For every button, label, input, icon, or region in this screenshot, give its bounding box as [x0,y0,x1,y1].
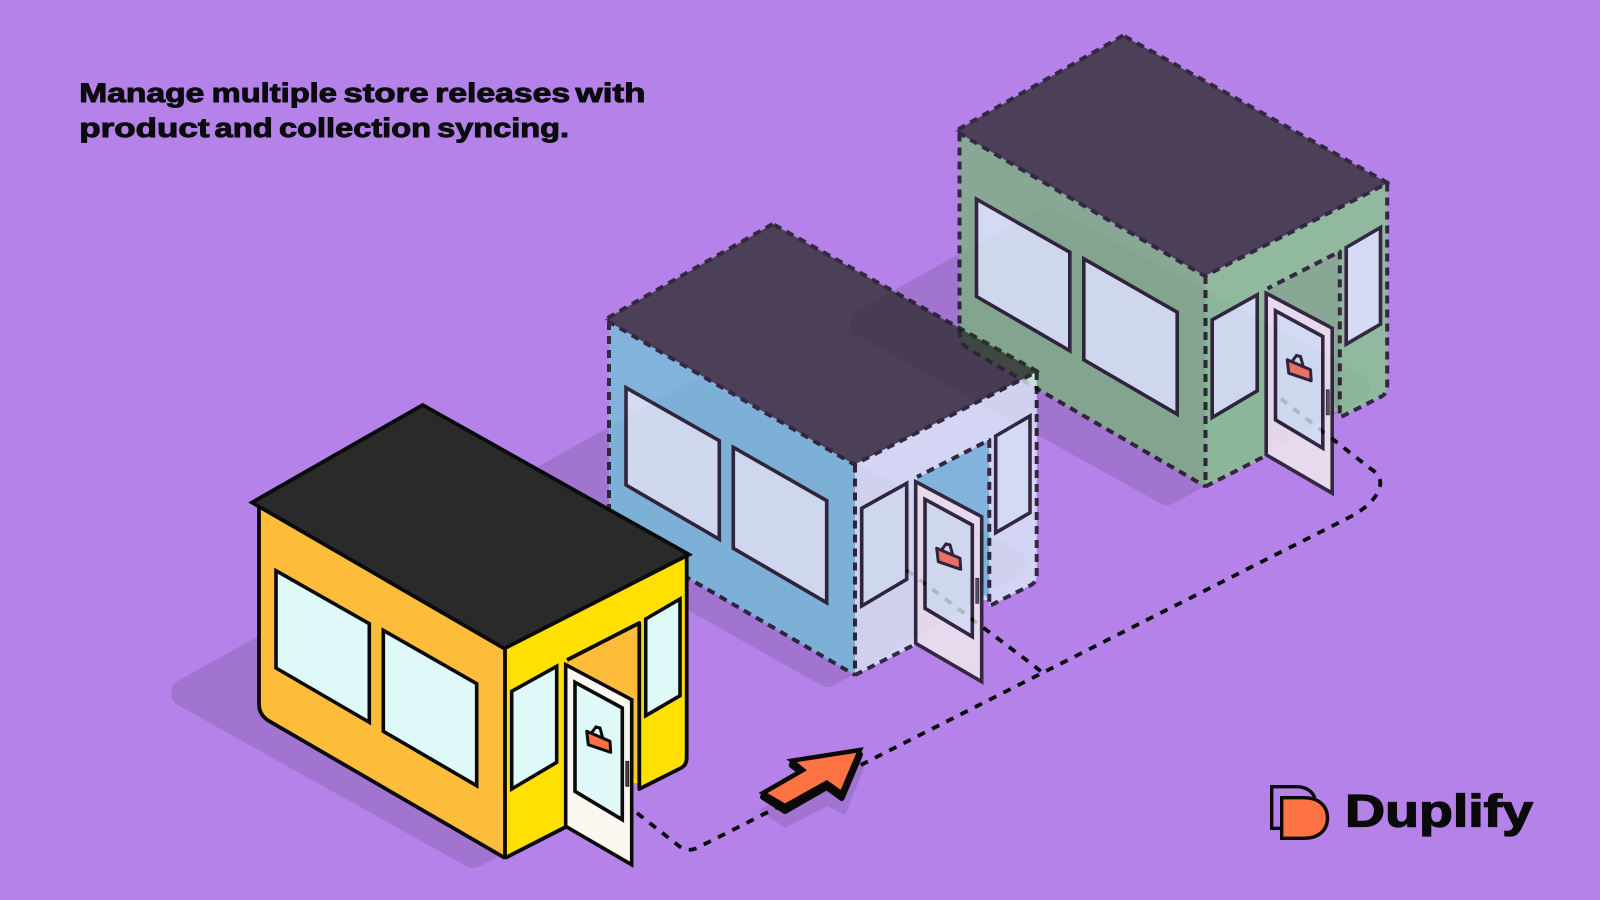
shadow: yellow store [185,591,661,854]
headline text: collection [279,113,431,143]
headline text: syncing. [437,113,569,143]
right wall [1206,184,1387,486]
roof [252,405,689,648]
roof edges [956,36,1388,276]
headline text: store [343,78,429,108]
open door [916,482,982,682]
doorway interior [1268,252,1340,412]
roof [605,224,1037,464]
arrow face [763,750,860,806]
wall edges [960,134,1387,488]
roof [956,36,1388,276]
logo mark [1272,787,1328,838]
store: blue release (dashed) [605,224,1037,682]
shadow: green store [864,221,1356,491]
shop windows [976,199,1380,418]
left wall [960,134,1206,486]
arrow shadow [758,750,864,828]
dashed route connecting the store doors [637,398,1380,850]
roof edges [605,224,1037,464]
shadow: blue store [514,394,1013,673]
headline text: Manage [79,78,204,108]
right wall [505,555,687,858]
wall edges [609,322,1037,676]
arrow extrusion [763,754,860,811]
headline text: product [79,113,210,143]
doorway interior [567,623,639,783]
headline text: and [214,113,273,143]
store: yellow live store (solid) [252,405,689,865]
arrow icon [758,750,864,828]
headline text [79,78,646,143]
open door [1266,293,1332,493]
open door [566,665,632,865]
store: green release (dashed) [956,36,1388,493]
shop windows [626,388,1030,606]
right wall [855,372,1037,675]
shop windows [276,571,680,789]
wall edges [259,505,687,859]
left wall [609,322,855,675]
left wall [259,505,505,858]
Duplify logo [1272,786,1533,838]
doorway interior [917,440,989,600]
wordmark: Duplify [1345,786,1533,837]
headline text: releases [435,78,570,108]
headline text: multiple [212,78,337,108]
headline text: with [574,78,646,108]
